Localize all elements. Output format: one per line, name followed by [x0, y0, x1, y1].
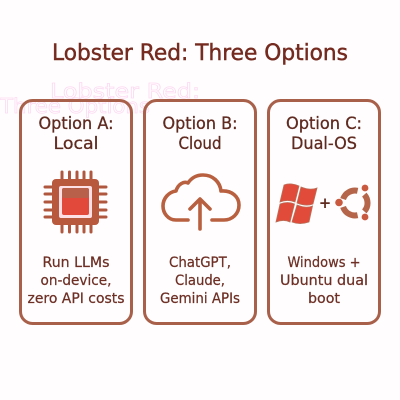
icon: windows logo — [276, 184, 317, 224]
body text: option C: boot — [308, 291, 340, 307]
ghost title artifact: Lobster Red: — [50, 79, 200, 103]
heading: option C: Option C: — [286, 114, 362, 133]
heading: option A — [38, 114, 114, 153]
panel: option C — [268, 100, 380, 324]
panel: option B — [144, 100, 256, 324]
body text: option A: zero API costs — [28, 291, 124, 307]
body text: option C: Windows + — [288, 255, 360, 271]
heading: option C: Dual-OS — [291, 134, 357, 153]
ghost title artifact — [0, 79, 200, 118]
body text: option B: Gemini APIs — [160, 291, 240, 307]
panel: option A — [20, 100, 132, 324]
heading: option C — [286, 114, 362, 153]
icon: ubuntu logo — [335, 185, 368, 220]
body text: option A: Run LLMs — [42, 255, 110, 271]
icon: processor chip — [45, 172, 106, 232]
heading: option B: Option B: — [162, 114, 238, 133]
body text: option C — [280, 255, 368, 307]
body text: option B — [160, 255, 240, 307]
heading: option B: Cloud — [178, 134, 222, 153]
body text: option B: ChatGPT, — [169, 255, 231, 271]
heading: option A: Option A: — [38, 114, 114, 133]
body text: option C: Ubuntu dual — [280, 273, 368, 289]
title: Lobster Red: Three Options — [52, 41, 348, 66]
body text: option A — [28, 255, 124, 307]
plus sign: + — [319, 194, 331, 212]
heading: option B — [162, 114, 238, 153]
ghost title artifact: Three Options — [0, 94, 150, 118]
icon: cloud upload — [163, 175, 239, 229]
heading: option A: Local — [54, 134, 98, 153]
body text: option A: on-device, — [40, 273, 112, 289]
body text: option B: Claude, — [175, 273, 225, 289]
